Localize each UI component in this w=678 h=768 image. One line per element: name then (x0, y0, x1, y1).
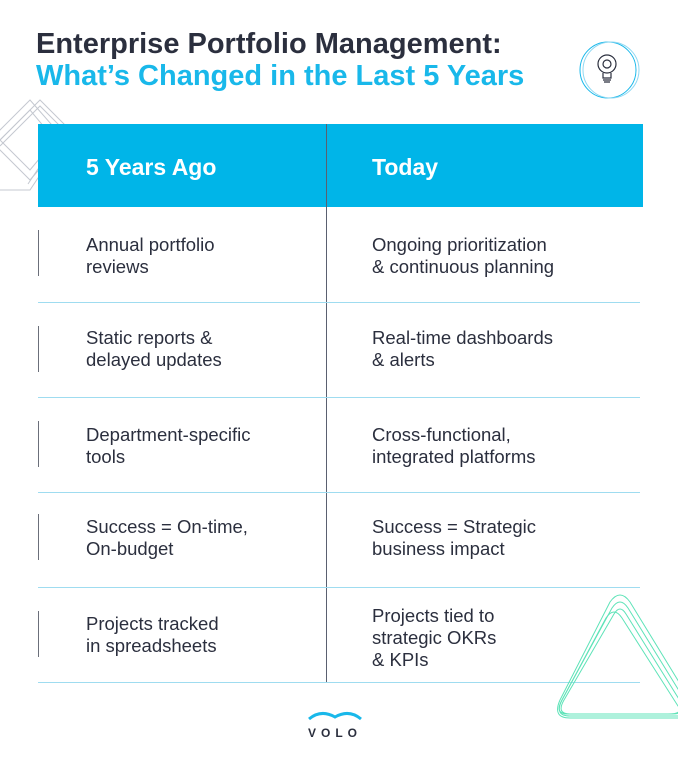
title (36, 28, 524, 92)
text: Ongoing prioritization (372, 234, 547, 255)
row 3 (86, 424, 251, 467)
table header: Today (372, 154, 438, 180)
row 4: On-budget (86, 538, 173, 559)
row 5 (86, 613, 219, 656)
text: & KPIs (372, 649, 429, 670)
row 1: reviews (86, 256, 149, 277)
table header (38, 124, 643, 207)
text: Cross-functional, (372, 424, 511, 445)
logo (308, 712, 362, 740)
row 3: tools (86, 446, 125, 467)
title: Enterprise Portfolio Management: (36, 28, 502, 60)
row 1: Annual portfolio (86, 234, 215, 255)
title: What’s Changed in the Last 5 Years (36, 60, 524, 92)
text: strategic OKRs (372, 627, 496, 648)
row 2: Static reports & (86, 327, 212, 348)
row 2 (86, 327, 222, 370)
text: Real-time dashboards (372, 327, 553, 348)
text: business impact (372, 538, 505, 559)
text: integrated platforms (372, 446, 536, 467)
logo: VOLO (308, 726, 362, 740)
row 4 (86, 516, 248, 559)
row 3: Department-specific (86, 424, 251, 445)
text: Success = Strategic (372, 516, 536, 537)
text: Projects tied to (372, 605, 494, 626)
row 2: delayed updates (86, 349, 222, 370)
table header: 5 Years Ago (86, 154, 216, 180)
decoration: triangle (557, 594, 678, 718)
row 5: Projects tracked (86, 613, 219, 634)
row 5: in spreadsheets (86, 635, 217, 656)
text: & continuous planning (372, 256, 554, 277)
row 1 (86, 234, 215, 277)
decoration: diamonds (0, 100, 64, 190)
row 4: Success = On-time, (86, 516, 248, 537)
icon: lightbulb (580, 42, 640, 98)
text: & alerts (372, 349, 435, 370)
